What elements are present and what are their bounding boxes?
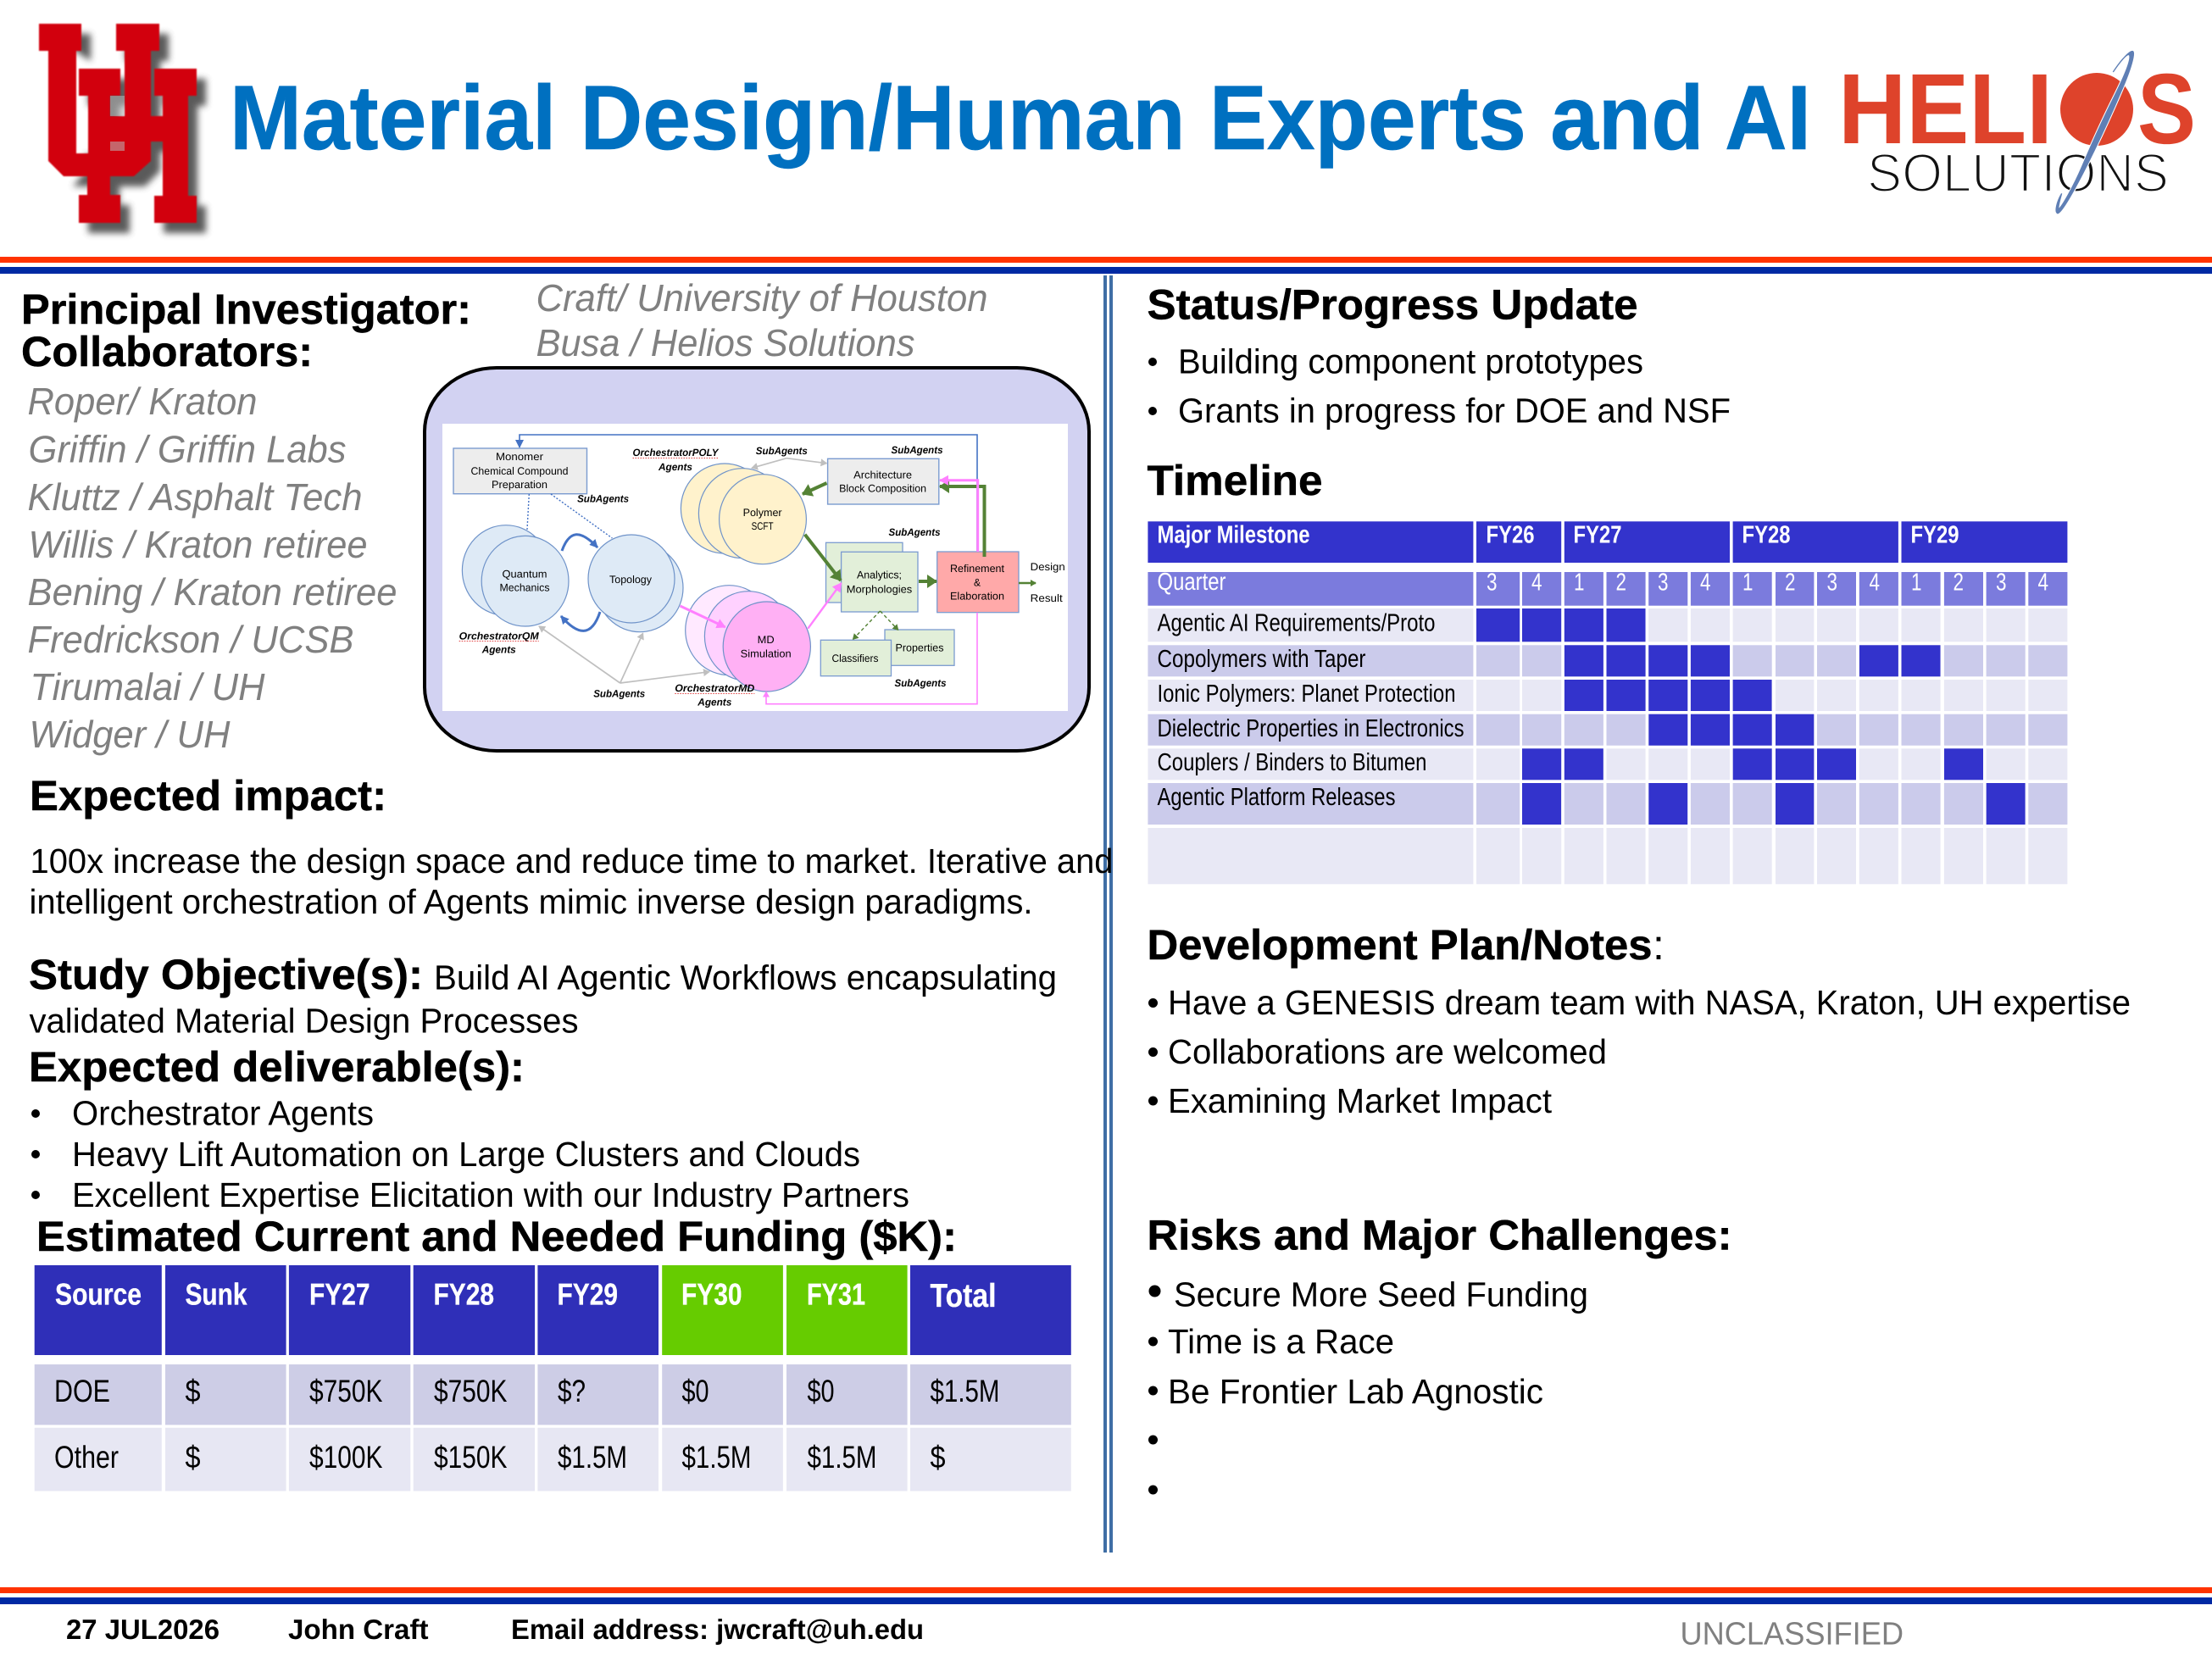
arrows: dotted monomer outputs (527, 494, 612, 538)
box: monomer: Preparation (492, 479, 547, 491)
funding header labels: FY28 (434, 1276, 494, 1312)
funding row: Other: $150K (434, 1440, 508, 1475)
text: study objectives: Study Objective(s): (29, 951, 423, 998)
box: analytics and morphologies: Morphologies (847, 583, 912, 595)
icon: Helios Solutions logo: S (2137, 53, 2196, 165)
box: architecture: Block Composition (839, 483, 926, 495)
ellipses: MD simulation: Simulation (741, 648, 792, 660)
center column divider (1103, 275, 1113, 1553)
bottom footer rule (0, 1587, 2212, 1604)
collaborators list (27, 380, 397, 756)
ellipses: MD simulation (686, 586, 810, 692)
ellipses: quantum mechanics (462, 525, 569, 626)
collaborators list: Bening / Kraton retiree (27, 570, 397, 614)
diagram labels: orchestrators and subagents: Agents (481, 644, 516, 656)
heading: timeline: Timeline (1148, 457, 1322, 504)
arrows: gray subagents (539, 458, 827, 683)
gantt quarter labels: 4 (1531, 569, 1542, 597)
box: refinement and elaboration: Refinement (950, 563, 1005, 575)
ellipses: polymer SCFT: SCFT (752, 520, 774, 532)
ellipses: topology: Topology (609, 574, 653, 586)
box: refinement and elaboration: & (974, 577, 981, 589)
collaborators list: Roper/ Kraton (27, 380, 258, 423)
text: design result: Result (1031, 592, 1063, 604)
gantt quarter labels: 4 (1870, 569, 1880, 597)
gantt quarter labels: 4 (1700, 569, 1710, 597)
funding row: Other: $1.5M (558, 1440, 627, 1475)
ellipses: MD simulation: MD (758, 634, 775, 646)
funding header labels: FY27 (309, 1276, 370, 1312)
gantt quarter labels: 3 (1658, 569, 1668, 597)
heading: expected impact: Expected impact: (30, 772, 386, 819)
footer: date: 27 JUL2026 (66, 1614, 220, 1645)
box: classifiers: Classifiers (832, 653, 878, 664)
diagram labels: orchestrators and subagents: SubAgents (756, 445, 808, 457)
footer: classification: UNCLASSIFIED (1680, 1617, 1904, 1653)
gantt milestone labels: Dielectric Properties in Electronics (1158, 715, 1464, 742)
gantt milestone labels: Ionic Polymers: Planet Protection (1158, 681, 1456, 708)
list: deliverables: Excellent Expertise Elicitation with our Industry Partners (72, 1175, 909, 1214)
heading: expected deliverables: Expected deliverable(s): (29, 1043, 525, 1091)
funding header labels: Source (55, 1276, 142, 1312)
gantt quarter labels: 3 (1996, 569, 2007, 597)
text: design result: Design (1031, 561, 1065, 573)
funding row: DOE (54, 1374, 1000, 1408)
gantt bars: Agentic Platform Releases (1522, 783, 2026, 825)
footer: author: John Craft (288, 1614, 429, 1645)
arrows: green design flow (803, 483, 1036, 583)
gantt quarter labels (1158, 569, 2048, 597)
table: funding (35, 1265, 1071, 1492)
gantt quarter labels: Quarter (1158, 569, 1226, 596)
funding row: DOE: $0 (807, 1374, 834, 1408)
funding row: DOE: DOE (54, 1374, 110, 1408)
diagram labels: orchestrators and subagents: OrchestratorPOLY (632, 447, 719, 458)
diagram labels: orchestrators and subagents: Agents (658, 461, 692, 473)
box: architecture (828, 458, 939, 504)
gantt quarter labels: 3 (1827, 569, 1837, 597)
list: status (1148, 342, 1731, 431)
gantt quarter labels: 2 (1615, 569, 1626, 597)
diagram labels: orchestrators and subagents: SubAgents (593, 687, 646, 699)
funding header labels: Total (931, 1278, 997, 1314)
principal investigators names (536, 276, 988, 364)
funding row: Other: $ (185, 1440, 200, 1475)
gantt quarter labels: 1 (1911, 569, 1922, 597)
ellipses: polymer SCFT: Polymer (743, 507, 782, 519)
icon: University of Houston UH logo (39, 24, 206, 233)
diagram labels: orchestrators and subagents: Agents (697, 697, 732, 708)
gantt quarter labels: 1 (1574, 569, 1585, 597)
gantt milestone labels: Agentic Platform Releases (1158, 784, 1395, 811)
principal investigators names: Craft/ University of Houston (536, 276, 988, 319)
text: design result (1031, 561, 1065, 604)
box: refinement and elaboration: Elaboration (950, 591, 1004, 603)
gantt header: Major Milestone (1158, 522, 1310, 549)
gantt quarter labels: 3 (1487, 569, 1497, 597)
heading: principal investigator: Principal Investigator: (21, 286, 471, 333)
funding header labels (55, 1276, 997, 1314)
arrows: quantum and topology exchange (561, 535, 600, 631)
heading: funding: Estimated Current and Needed Funding ($K): (36, 1213, 957, 1260)
funding row: Other: $100K (309, 1440, 383, 1475)
funding row: Other (54, 1440, 946, 1475)
gantt milestone labels: Copolymers with Taper (1158, 646, 1366, 673)
box: analytics and morphologies (825, 542, 918, 612)
funding row: DOE: $? (558, 1374, 586, 1408)
funding row: DOE: $750K (434, 1374, 508, 1408)
diagram labels: orchestrators and subagents: OrchestratorMD (675, 682, 755, 694)
gantt milestone labels: Agentic AI Requirements/Proto (1158, 610, 1436, 637)
funding row: DOE: $1.5M (931, 1374, 1000, 1408)
list: development notes: Collaborations are welcomed (1168, 1032, 1607, 1071)
list: risks: Secure More Seed Funding (1174, 1275, 1588, 1314)
text: expected impact body: 100x increase the design space and reduce time to market. Iterative and (31, 842, 1114, 880)
gantt bars: Dielectric Properties (1648, 714, 1814, 746)
funding header labels: FY29 (558, 1276, 618, 1312)
box: analytics and morphologies: Analytics; (857, 569, 902, 581)
gantt bars: Ionic Polymers (1565, 680, 1772, 711)
gantt bars: Couplers / Binders (1522, 748, 1983, 780)
diagram labels: orchestrators and subagents: SubAgents (895, 677, 947, 689)
footer: email: Email address: jwcraft@uh.edu (511, 1614, 924, 1645)
box: monomer: Monomer (496, 451, 543, 463)
arrow: feedback to monomer (520, 435, 977, 553)
list: deliverables (31, 1093, 909, 1214)
gantt quarter labels: 2 (1953, 569, 1964, 597)
table: timeline gantt (1148, 521, 2067, 886)
list: development notes: Examining Market Impact (1168, 1081, 1553, 1120)
arrows: pink MD flow (680, 481, 978, 704)
box: properties: Properties (895, 642, 944, 653)
text: study objectives: validated Material Design Processes (29, 1002, 578, 1041)
ellipses: quantum mechanics: Mechanics (500, 582, 549, 594)
list: risks: Time is a Race (1168, 1322, 1394, 1361)
collaborators list: Fredrickson / UCSB (27, 618, 354, 661)
box: monomer: Chemical Compound (471, 465, 569, 477)
heading: risks: Risks and Major Challenges: (1148, 1212, 1732, 1259)
collaborators list: Widger / UH (29, 713, 231, 756)
box: monomer (453, 448, 586, 494)
box: classifiers (820, 640, 892, 676)
diagram labels: orchestrators and subagents: OrchestratorQM (459, 630, 540, 642)
gantt quarter labels: 2 (1785, 569, 1795, 597)
text: expected impact body (29, 842, 1114, 921)
text: study objectives (29, 951, 1057, 1041)
list: risks (1148, 1275, 1588, 1495)
heading: development plan: : (1653, 921, 1665, 969)
funding header labels: FY31 (807, 1276, 865, 1312)
list: deliverables: Heavy Lift Automation on Large Clusters and Clouds (72, 1135, 860, 1174)
panel: agentic workflow diagram (425, 368, 1089, 751)
list: risks: Be Frontier Lab Agnostic (1168, 1372, 1543, 1411)
box: properties (885, 630, 954, 665)
diagram labels: orchestrators and subagents: SubAgents (577, 492, 629, 504)
collaborators list: Willis / Kraton retiree (29, 523, 368, 566)
ellipses: polymer SCFT (681, 464, 806, 564)
funding row: DOE: $ (185, 1374, 200, 1408)
icon: Helios Solutions logo: SOLUTIONS (1867, 142, 2169, 203)
funding row: Other: Other (54, 1440, 119, 1475)
funding header labels: Sunk (185, 1276, 247, 1312)
list: status: Building component prototypes (1178, 342, 1643, 381)
top header rule (0, 257, 2212, 274)
gantt quarter labels: 4 (2037, 569, 2048, 597)
funding row: DOE: $750K (309, 1374, 383, 1408)
box: refinement and elaboration (937, 552, 1019, 613)
ellipses: topology (588, 535, 683, 632)
funding row: DOE: $0 (681, 1374, 709, 1408)
text: study objectives: Build AI Agentic Workflows encapsulating (434, 958, 1057, 997)
gantt milestone labels: Couplers / Binders to Bitumen (1158, 749, 1427, 776)
text: expected impact body: intelligent orchestration of Agents mimic inverse design paradigms. (29, 882, 1032, 921)
gantt header (1148, 521, 2067, 563)
icon: Helios Solutions logo (1838, 52, 2196, 214)
list: development notes: Have a GENESIS dream team with NASA, Kraton, UH expertise (1168, 983, 2131, 1022)
gantt bars: Copolymers with Taper (1565, 645, 1941, 676)
gantt header: FY28 (1742, 522, 1790, 549)
gantt header: FY29 (1910, 522, 1959, 549)
collaborators list: Tirumalai / UH (31, 665, 265, 708)
gantt bars: Agentic AI Requirements/Proto (1476, 608, 1646, 642)
gantt header: FY26 (1487, 522, 1534, 549)
funding row: Other: $ (931, 1440, 946, 1475)
list: deliverables: Orchestrator Agents (72, 1093, 374, 1132)
list: development notes (1148, 983, 2131, 1120)
heading: development plan: Development Plan/Notes (1148, 921, 1653, 969)
gantt milestone labels (1158, 610, 1464, 811)
diagram labels: orchestrators and subagents: SubAgents (888, 526, 941, 538)
list: status: Grants in progress for DOE and NSF (1178, 392, 1731, 431)
collaborators list: Kluttz / Asphalt Tech (27, 475, 363, 519)
collaborators list: Griffin / Griffin Labs (29, 427, 346, 471)
icon: Helios Solutions logo: HELI (1838, 53, 2053, 165)
box: architecture: Architecture (853, 469, 912, 481)
principal investigators names: Busa / Helios Solutions (536, 321, 915, 364)
ellipses: quantum mechanics: Quantum (502, 569, 547, 581)
gantt quarter labels: 1 (1742, 569, 1753, 597)
heading: status/progress update: Status/Progress Update (1148, 281, 1637, 329)
diagram labels: orchestrators and subagents: SubAgents (892, 444, 943, 456)
arrows: green dashed outputs (853, 611, 898, 639)
diagram labels: orchestrators and subagents (459, 444, 947, 708)
title: Material Design/Human Experts and AI (230, 66, 1811, 169)
heading: collaborators: Collaborators: (21, 328, 313, 375)
funding row: Other: $1.5M (807, 1440, 876, 1475)
funding header labels: FY30 (681, 1276, 742, 1312)
gantt header: FY27 (1573, 522, 1622, 549)
funding row: Other: $1.5M (681, 1440, 751, 1475)
